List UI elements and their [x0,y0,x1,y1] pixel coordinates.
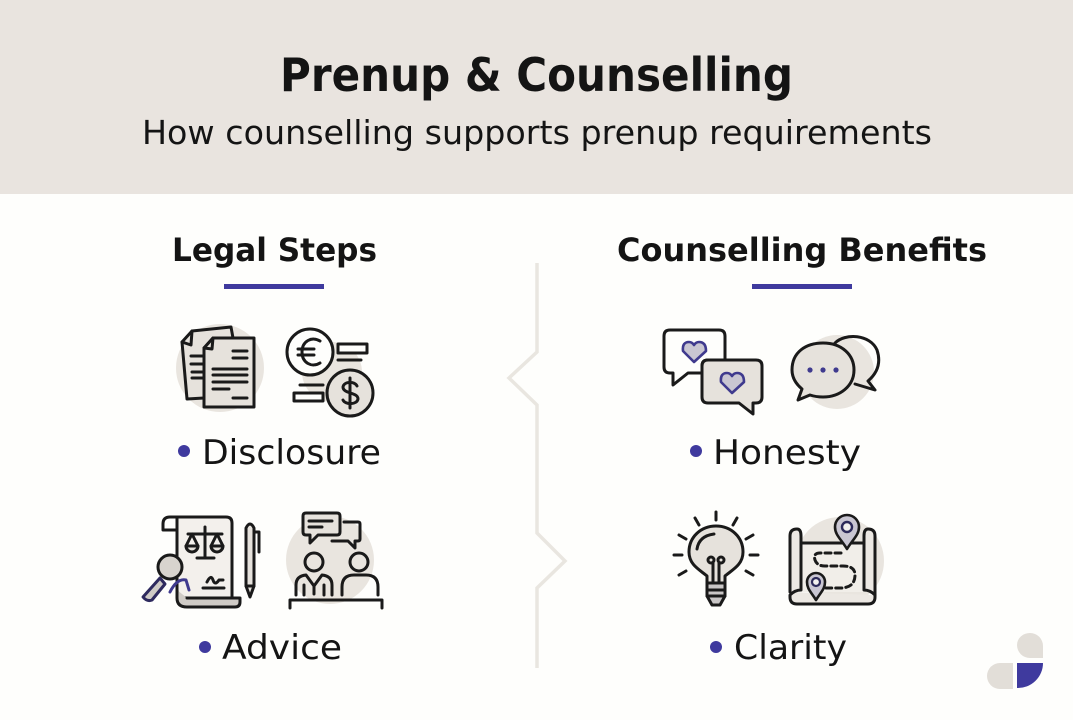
title: Prenup & Counselling [280,48,793,102]
icon: legal document and pen [143,517,259,607]
heading: legal steps: Legal Steps [172,231,377,269]
icon: currency coins [287,329,373,416]
heading: counselling benefits: Counselling Benefits [617,231,987,269]
header banner [0,0,1073,194]
icon: light bulb [674,512,758,605]
label: advice: Advice [222,628,342,668]
center divider [509,263,565,668]
panel: legal steps [143,231,382,668]
subtitle: How counselling supports prenup requirements [142,113,932,152]
logo mark [987,633,1043,689]
panel: counselling benefits [617,231,987,668]
icon: heart speech bubbles [664,330,762,414]
icon: conversation bubbles [792,335,879,409]
heading: legal steps [172,231,377,289]
icon: advisor meeting [286,513,382,608]
label: clarity: Clarity [734,628,847,668]
icon: documents [176,324,264,412]
icon: map with pins [790,515,884,605]
label: honesty: Honesty [713,433,861,473]
label: disclosure: Disclosure [202,433,381,473]
heading: counselling benefits [617,231,987,289]
